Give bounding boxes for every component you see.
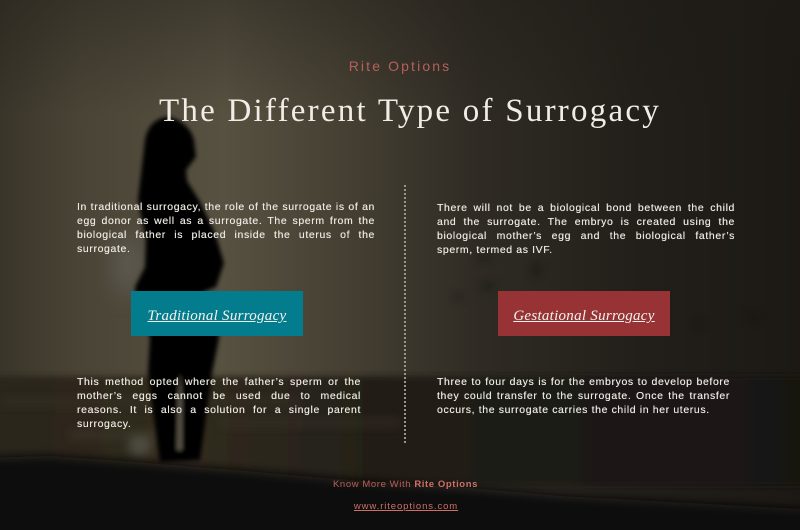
text block: gestational surrogacy process: Three to four days is for the embryos to develop before (437, 376, 730, 388)
footer call to action: Know More With Rite Options (333, 479, 478, 490)
text block: traditional surrogacy use: reasons. It is also a solution for a single parent (77, 404, 361, 416)
text block: gestational surrogacy description (437, 202, 735, 256)
title: The Different Type of Surrogacy (159, 93, 661, 129)
brand label: Rite Options (349, 58, 451, 74)
text block: traditional surrogacy description: egg donor as well as a surrogate. The sperm from the (77, 215, 375, 227)
text block: gestational surrogacy description: There will not be a biological bond between the child (437, 202, 735, 214)
text block: traditional surrogacy description (77, 201, 375, 255)
text block: traditional surrogacy use (77, 376, 361, 430)
text block: gestational surrogacy description: biological mother’s egg and the biological father’s (437, 230, 735, 242)
button: traditional surrogacy (131, 291, 303, 336)
text block: traditional surrogacy use: surrogacy. (77, 418, 131, 430)
text block: traditional surrogacy use: mother’s eggs cannot be used due to medical (77, 390, 361, 402)
text block: gestational surrogacy description: and the surrogate. The embryo is created using the (437, 216, 735, 228)
footer website link: www.riteoptions.com (354, 501, 458, 512)
text block: traditional surrogacy description: surrogate. (77, 243, 130, 255)
text block: traditional surrogacy use: This method opted where the father’s sperm or the (77, 376, 361, 388)
text block: traditional surrogacy description: biological father is placed inside the uterus of the (77, 229, 375, 241)
text block: gestational surrogacy description: sperm, termed as IVF. (437, 244, 553, 256)
center dotted divider (404, 185, 406, 443)
button: traditional surrogacy: Traditional Surrogacy (148, 308, 286, 324)
text block: gestational surrogacy process: they could transfer to the surrogate. Once the transfer (437, 390, 730, 402)
text block: traditional surrogacy description: In traditional surrogacy, the role of the surrogate is of an (77, 201, 375, 213)
text block: gestational surrogacy process (436, 376, 730, 416)
silhouette figure (135, 117, 224, 462)
button: gestational surrogacy (498, 291, 670, 336)
text block: gestational surrogacy process: occurs, the surrogate carries the child in her uterus. (437, 404, 710, 416)
button: gestational surrogacy: Gestational Surrogacy (513, 308, 655, 324)
